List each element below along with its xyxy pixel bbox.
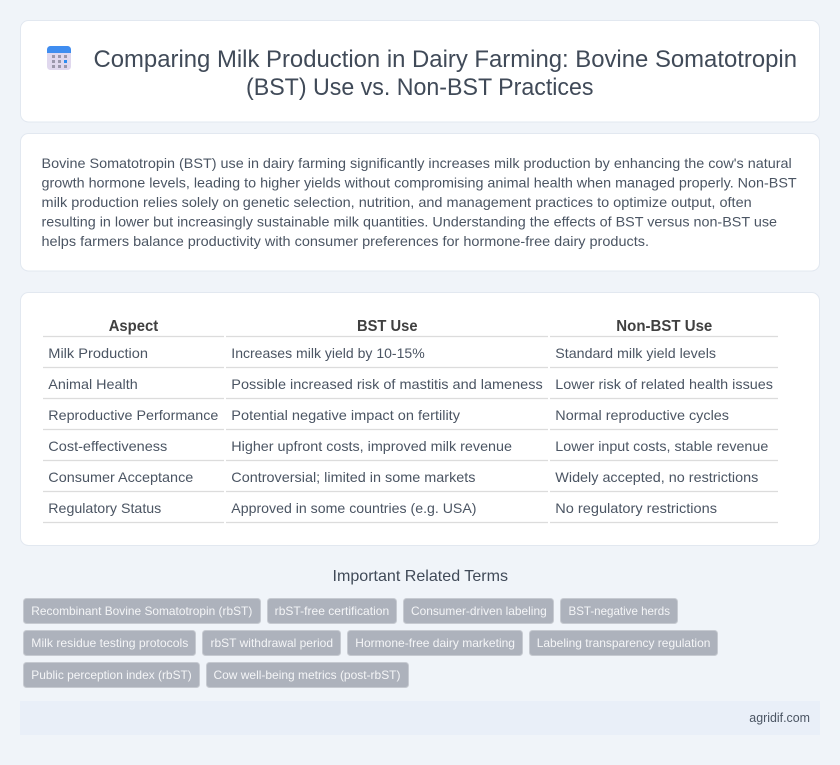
row: cost-effectiveness: Higher upfront costs, improved milk revenue bbox=[231, 438, 512, 454]
row: animal health: Animal Health bbox=[48, 376, 138, 392]
tag bbox=[268, 598, 396, 624]
table header row bbox=[109, 318, 712, 335]
panel: header bbox=[20, 20, 820, 122]
tags: related terms bbox=[24, 598, 718, 688]
row: animal health: Possible increased risk of mastitis and lameness bbox=[231, 376, 543, 392]
tag bbox=[24, 630, 196, 656]
row: cost-effectiveness bbox=[48, 438, 769, 454]
row: animal health: Lower risk of related health issues bbox=[555, 376, 773, 392]
tag bbox=[206, 662, 408, 688]
panel: introduction text: Bovine Somatotropin (BST) use in dairy farming significantly increases milk production by enhancing the cow's natural bbox=[42, 155, 792, 171]
row: consumer acceptance: Consumer Acceptance bbox=[48, 469, 194, 485]
tag bbox=[560, 598, 678, 624]
tag bbox=[348, 630, 522, 656]
icon: calendar bbox=[47, 46, 71, 70]
row: regulatory status: Regulatory Status bbox=[48, 500, 161, 516]
row: reproductive performance: Normal reproductive cycles bbox=[555, 407, 729, 423]
tag: Hormone-free dairy marketing bbox=[355, 636, 515, 650]
table header row: BST Use bbox=[357, 318, 418, 335]
row: regulatory status: Approved in some countries (e.g. USA) bbox=[231, 500, 476, 516]
row: consumer acceptance bbox=[48, 469, 758, 485]
row: regulatory status: No regulatory restrictions bbox=[555, 500, 717, 516]
tag bbox=[24, 662, 200, 688]
row: milk production: Milk Production bbox=[48, 345, 148, 361]
panel: introduction text: resulting in lower but increasingly sustainable milk quantities. Understanding the effects of BST versus non-BST use bbox=[42, 214, 777, 230]
tag bbox=[404, 598, 554, 624]
panel: comparison table bbox=[20, 292, 820, 546]
table header row: Non-BST Use bbox=[616, 318, 712, 335]
tag: Consumer-driven labeling bbox=[411, 604, 547, 618]
panel: introduction text bbox=[20, 134, 820, 271]
heading: important related terms: Important Related Terms bbox=[332, 568, 508, 585]
tag bbox=[530, 630, 718, 656]
row: reproductive performance: Potential negative impact on fertility bbox=[231, 407, 460, 423]
row: consumer acceptance: Widely accepted, no restrictions bbox=[555, 469, 758, 485]
tag: Labeling transparency regulation bbox=[537, 636, 710, 650]
title: (BST) Use vs. Non-BST Practices bbox=[246, 74, 594, 101]
row: animal health bbox=[48, 376, 773, 392]
tag: Milk residue testing protocols bbox=[31, 636, 188, 650]
tag: rbST-free certification bbox=[275, 604, 389, 618]
tag: BST-negative herds bbox=[568, 604, 670, 618]
tag: Public perception index (rbST) bbox=[31, 668, 192, 682]
panel: introduction text: helps farmers balance productivity with consumer preferences for hormone-free dairy products. bbox=[42, 233, 649, 249]
tag: Recombinant Bovine Somatotropin (rbST) bbox=[31, 604, 252, 618]
row: reproductive performance: Reproductive Performance bbox=[48, 407, 219, 423]
tag bbox=[24, 598, 260, 624]
row: cost-effectiveness: Lower input costs, stable revenue bbox=[555, 438, 769, 454]
title: Comparing Milk Production in Dairy Farming: Bovine Somatotropin bbox=[94, 46, 797, 73]
row: consumer acceptance: Controversial; limited in some markets bbox=[231, 469, 476, 485]
tag: rbST withdrawal period bbox=[210, 636, 333, 650]
table header row: Aspect bbox=[109, 318, 159, 335]
row: milk production: Increases milk yield by 10-15% bbox=[231, 345, 425, 361]
title bbox=[94, 46, 797, 101]
tag bbox=[202, 630, 340, 656]
row: cost-effectiveness: Cost-effectiveness bbox=[48, 438, 167, 454]
panel: introduction text: milk production relies solely on genetic selection, nutrition, and management practices to optimize output, often bbox=[42, 194, 752, 210]
row: milk production: Standard milk yield levels bbox=[555, 345, 716, 361]
row: regulatory status bbox=[48, 500, 717, 516]
panel: introduction text: growth hormone levels, leading to higher yields without compromising animal health when managed properly. Non-BST bbox=[42, 174, 797, 190]
row: milk production bbox=[48, 345, 716, 361]
footer bbox=[20, 701, 820, 735]
footer: agridif.com bbox=[749, 711, 810, 725]
tag: Cow well-being metrics (post-rbST) bbox=[214, 668, 400, 682]
row: reproductive performance bbox=[48, 407, 729, 423]
